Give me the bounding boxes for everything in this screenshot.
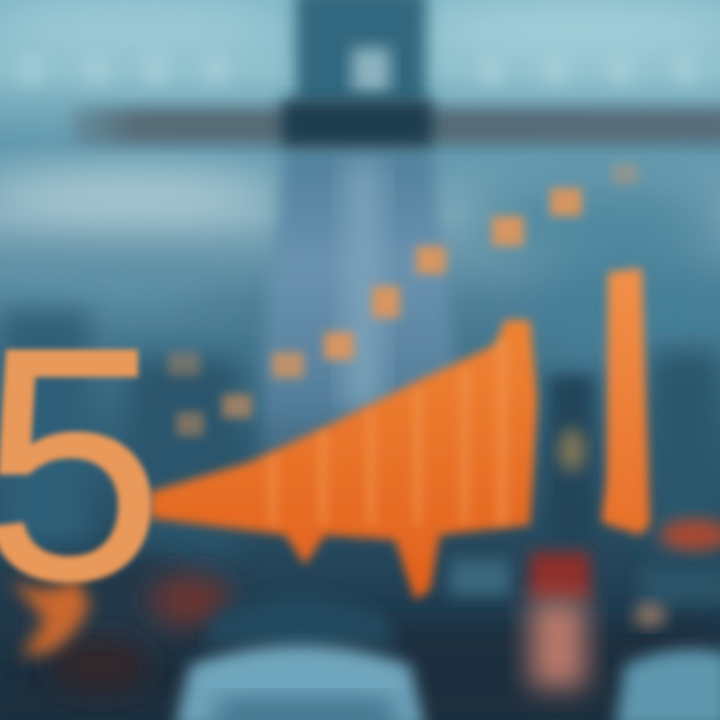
horizontal dark band (72, 100, 720, 146)
chart: dotted trend line (168, 164, 638, 436)
chart: orange area (150, 320, 538, 600)
tower (262, 0, 455, 480)
faint lights on upper left and right (20, 55, 697, 85)
distant skyline (0, 310, 720, 550)
chart: area ribs (268, 340, 508, 525)
central figure and red accents (548, 375, 720, 551)
cars in traffic (0, 552, 720, 720)
numeral tail (10, 575, 90, 655)
chart: tall orange bar (600, 268, 650, 535)
clouds (0, 0, 720, 360)
